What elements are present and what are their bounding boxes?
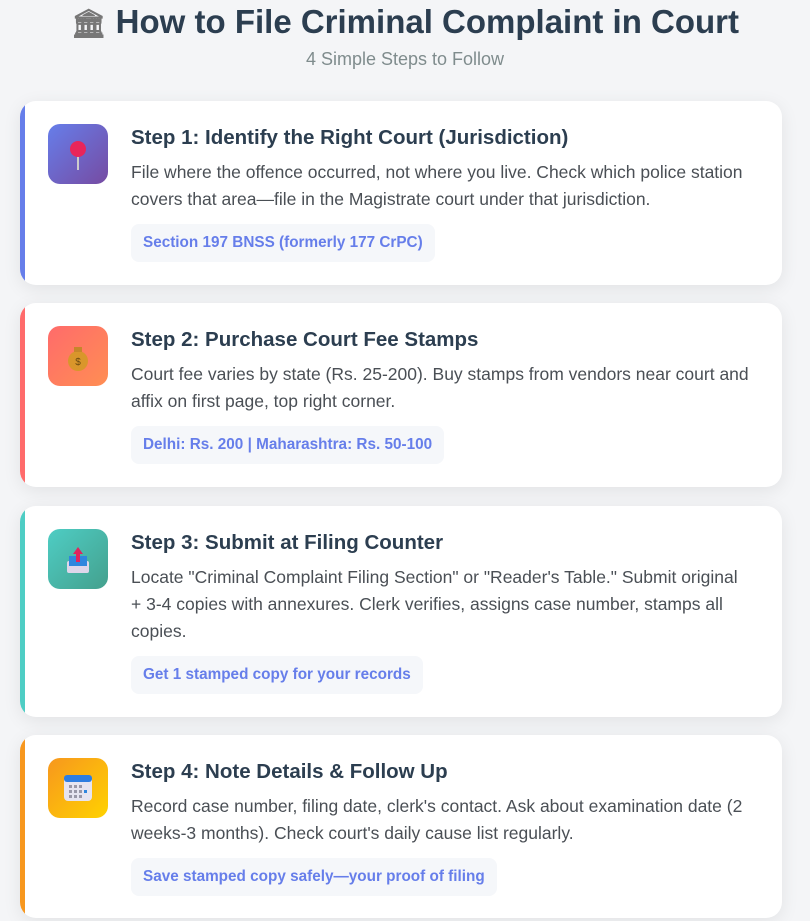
- step 4 tag: [131, 858, 497, 896]
- step 3 text: + 3-4 copies with annexures. Clerk verifies, assigns case number, stamps all copies.: [131, 594, 723, 641]
- step 2 tag: Delhi: Rs. 200 | Maharashtra: Rs. 50-100: [143, 436, 432, 453]
- step 1 text: File where the offence occurred, not where you live. Check which police station covers that area—file in the Magistrate court under that jurisdiction.: [131, 162, 743, 209]
- icon: money bag: $: [75, 357, 81, 368]
- step 2 tag: [131, 426, 444, 464]
- step 4 tag: Save stamped copy safely—your proof of filing: [143, 868, 485, 885]
- step 4 text: Record case number, filing date, clerk's contact. Ask about examination date (2 weeks-3 months). Check court's daily cause list regularly.: [131, 796, 742, 843]
- panel: step 2: [20, 303, 782, 487]
- icon: outbox: [48, 529, 108, 589]
- step 1 tag: [131, 224, 435, 262]
- panel: step 1: [20, 101, 782, 285]
- step 4 title: Step 4: Note Details & Follow Up: [131, 760, 448, 783]
- step 3 title: Step 3: Submit at Filing Counter: [131, 531, 443, 554]
- icon: calendar: [48, 758, 108, 818]
- icon: pin: [48, 124, 108, 184]
- step 1 tag: Section 197 BNSS (formerly 177 CrPC): [143, 234, 423, 251]
- title: 🏛 How to File Criminal Complaint in Court: [71, 3, 739, 40]
- panel: step 3: [20, 506, 782, 717]
- step 2 text: Court fee varies by state (Rs. 25-200). Buy stamps from vendors near court and affix on first page, top right corner.: [131, 364, 749, 411]
- step 3 text: [131, 567, 738, 641]
- panel: step 4: [20, 735, 782, 918]
- step 3 tag: Get 1 stamped copy for your records: [143, 666, 411, 683]
- icon: money bag: [48, 326, 108, 386]
- step 1 title: Step 1: Identify the Right Court (Jurisdiction): [131, 126, 568, 149]
- step 3 text: Locate "Criminal Complaint Filing Section" or "Reader's Table." Submit original: [131, 567, 738, 587]
- subtitle: 4 Simple Steps to Follow: [306, 49, 504, 69]
- step 3 tag: [131, 656, 423, 694]
- step 2 title: Step 2: Purchase Court Fee Stamps: [131, 328, 478, 351]
